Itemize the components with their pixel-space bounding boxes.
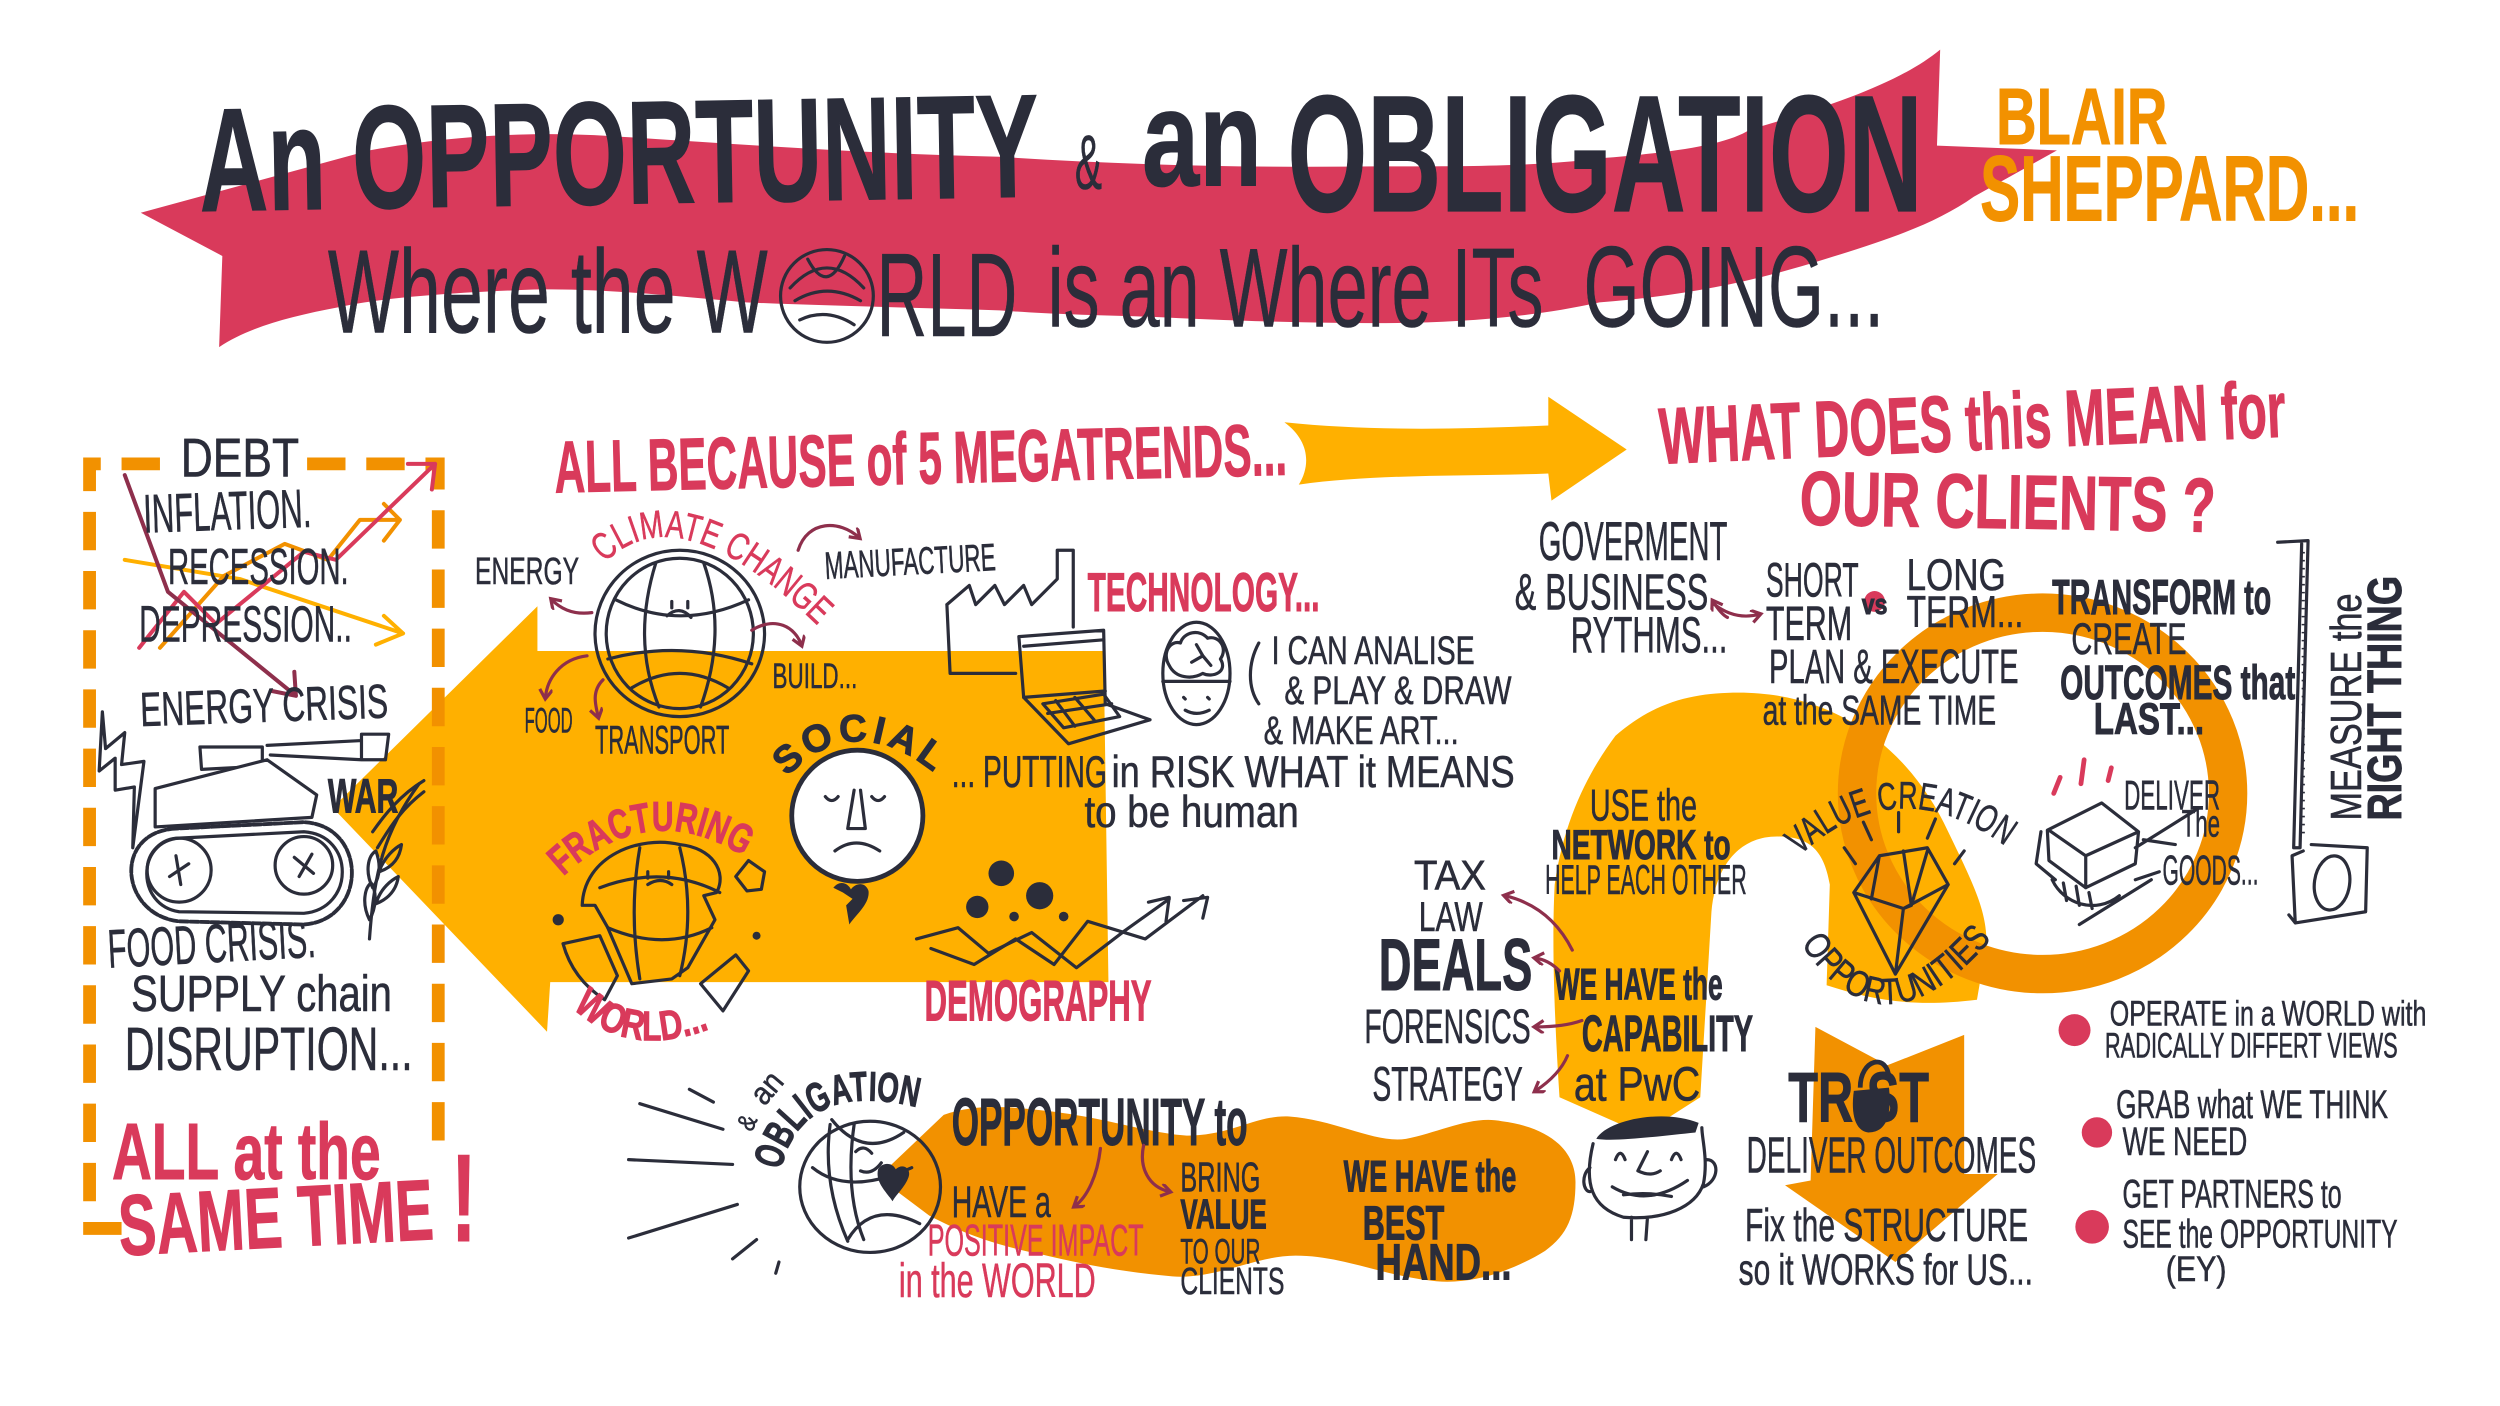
section: trust: TR ST	[1788, 1057, 1929, 1136]
icon: measuring tape: RIGHT THING	[2359, 576, 2412, 821]
section: government and business rhythms: PLAN & EXECUTE	[1769, 641, 2019, 694]
bullet list: actions: GET PARTNERS to	[2123, 1173, 2342, 1217]
section: capability text: HELP EACH OTHER	[1545, 856, 1747, 903]
panel text: crises list: INFLATION.	[142, 478, 312, 545]
section: opportunity text: HAVE a	[952, 1177, 1051, 1227]
presenter name	[1980, 72, 2359, 241]
icon: lightning bolt	[99, 712, 144, 848]
section: government and business rhythms: & BUSINESS	[1515, 563, 1708, 620]
section: transform to create outcomes: LAST...	[2094, 694, 2204, 744]
panel text: crises list: ENERGY CRISIS	[139, 676, 389, 737]
section: obligation globe: OBLIGATION	[755, 1071, 922, 1166]
panel text: crises list: RECESSION.	[168, 538, 349, 595]
megatrend: technology: & MAKE ART...	[1264, 709, 1459, 753]
section: opportunity text: in the WORLD	[899, 1255, 1096, 1308]
icon: measuring tape: MEASURE the	[2323, 593, 2371, 821]
section: trust	[1739, 1057, 2036, 1294]
section: capability text: at PwC	[1574, 1058, 1700, 1111]
subtitle: where the world is and where it's going	[328, 223, 1884, 362]
section: government and business rhythms: LONG	[1907, 550, 2006, 600]
heading: megatrends: ALL BECAUSE of 5 MEGATRENDS...	[553, 408, 1288, 509]
megatrend: climate change: FOOD	[525, 702, 573, 741]
megatrend: climate change: MANUFACTURE	[824, 536, 997, 588]
megatrend: demography	[917, 861, 1208, 1033]
panel text: crises list: FOOD CRISIS.	[106, 908, 317, 980]
megatrend: fracturing world	[545, 802, 766, 1041]
section: opportunity text: POSITIVE IMPACT	[928, 1216, 1144, 1266]
section: opportunity text	[899, 1085, 1516, 1308]
icon: wheat	[365, 781, 424, 939]
panel text: crises list: DEBT	[181, 428, 299, 489]
orange down arrow: trust	[1785, 1027, 1998, 1262]
section: government and business rhythms: GOVERMENT	[1539, 511, 1727, 572]
bullet list: actions: WE NEED	[2123, 1120, 2247, 1164]
section: obligation globe: &	[732, 1110, 763, 1135]
megatrend: social	[773, 714, 937, 924]
section: transform to create outcomes: CREATE	[2071, 614, 2187, 664]
big yellow arrow	[333, 606, 1108, 1032]
callout: all at the same time: !	[451, 1129, 477, 1268]
section: trust: so it WORKS for US...	[1739, 1246, 2033, 1294]
section: government and business rhythms: TERM...	[1907, 587, 2023, 637]
section: capability text	[1364, 781, 1753, 1111]
icon: globe with face as letter O	[781, 250, 873, 342]
subtitle: where the world is and where it's going: GOING...	[1583, 223, 1884, 351]
subtitle: where the world is and where it's going: RLD	[877, 230, 1017, 362]
section: value creation diamond	[1782, 782, 2018, 1005]
subtitle: where the world is and where it's going: Where the W	[328, 227, 768, 359]
megatrend: demography: DEMOGRAPHY	[925, 969, 1152, 1033]
callout: all at the same time	[112, 1107, 477, 1275]
section: capability text: WE HAVE the	[1555, 960, 1723, 1010]
icon: tank	[131, 734, 389, 925]
panel text: crises list: DEPRESSION..	[139, 595, 352, 652]
section: value creation diamond: VALUE CREATION	[1782, 782, 2018, 851]
title: main heading: &	[1075, 121, 1102, 206]
presenter name: BLAIR	[1996, 72, 2167, 161]
section: opportunity text: OPPORTUNITY to	[952, 1085, 1248, 1160]
section: capability text: FORENSICS	[1364, 1001, 1531, 1054]
section: opportunity text: HAND...	[1376, 1234, 1512, 1291]
icon: delivering box: GOODS...	[2163, 847, 2258, 894]
section: trust: Fix the STRUCTURE	[1745, 1199, 2028, 1251]
section: opportunity text: CLIENTS	[1180, 1260, 1284, 1303]
section: capability text: STRATEGY	[1372, 1058, 1523, 1111]
icon: measuring tape	[2278, 541, 2412, 923]
megatrend: technology: in RISK WHAT it MEANS	[1112, 747, 1515, 797]
banner: red ribbon	[141, 50, 2057, 347]
megatrend: climate change	[475, 510, 997, 762]
section: opportunity text: BRING	[1180, 1154, 1260, 1201]
title: main heading: an	[1142, 62, 1262, 216]
icon: delivering box	[2036, 760, 2258, 925]
bullet list: actions	[2059, 994, 2426, 1289]
top arrow to clients	[1284, 397, 1627, 501]
megatrend: technology: ... PUTTING	[952, 747, 1107, 797]
section: government and business rhythms	[1515, 511, 2023, 734]
megatrend: technology: & PLAY & DRAW	[1284, 669, 1512, 713]
megatrend: technology: to be human	[1084, 787, 1299, 837]
serpentine yellow arrow	[1553, 693, 1987, 1134]
section: trust: DELIVER OUTCOMES	[1747, 1126, 2036, 1183]
icon: delivering box: DELIVER	[2124, 771, 2220, 818]
icon: delivering box: The	[2182, 803, 2220, 846]
section: opportunity text: VALUE	[1180, 1190, 1267, 1237]
section: value creation diamond: OPPORTUNITIES	[1805, 925, 1988, 1005]
panel text: crises list	[106, 428, 413, 1083]
heading: what does this mean for our clients	[1657, 365, 2287, 549]
dark orange blob: best hand	[878, 1107, 1575, 1282]
section: capability text: TAX	[1414, 851, 1486, 898]
section: government and business rhythms: TERM	[1766, 598, 1852, 651]
section: government and business rhythms: SHORT	[1766, 555, 1859, 608]
subtitle: where the world is and where it's going: is an Where ITs	[1048, 225, 1544, 350]
bullet list: actions: (EY)	[2166, 1250, 2226, 1289]
section: capability text: NETWORK to	[1552, 821, 1731, 868]
section: transform to create outcomes	[2052, 569, 2295, 744]
section: opportunity text: TO OUR	[1180, 1233, 1260, 1272]
section: opportunity text: BEST	[1363, 1198, 1444, 1251]
megatrend: technology: TECHNOLOGY...	[1088, 562, 1320, 623]
panel: crises dashed box	[90, 464, 438, 1228]
megatrend: fracturing world: FRACTURING	[545, 802, 753, 876]
section: capability text: DEALS	[1379, 923, 1532, 1006]
section: government and business rhythms: vs	[1862, 589, 1887, 621]
section: capability text: USE the	[1590, 781, 1697, 831]
dark orange ring	[1857, 613, 2228, 974]
callout: all at the same time: ALL at the	[112, 1107, 381, 1196]
icon: smiling head	[1584, 1116, 1716, 1240]
megatrend: technology	[947, 550, 1515, 837]
panel text: crises list: SUPPLY chain	[131, 965, 392, 1022]
section: obligation globe: an	[742, 1064, 790, 1111]
megatrend: fracturing world: WORLD...	[576, 985, 708, 1041]
megatrend: climate change: ENERGY	[475, 550, 579, 593]
megatrend: climate change: CLIMATE CHANGE	[592, 510, 835, 626]
title: main heading: An OPPORTUNITY	[198, 65, 1040, 243]
heading: what does this mean for our clients: OUR CLIENTS ?	[1799, 457, 2216, 549]
section: capability text: CAPABILITY	[1582, 1005, 1753, 1062]
title: main heading: OBLIGATION	[1288, 61, 1923, 247]
megatrend: social: SOCIAL	[773, 714, 937, 773]
megatrend: climate change: BUILD...	[773, 657, 857, 696]
panel text: crises list: DISRUPTION...	[125, 1015, 413, 1083]
section: capability text: LAW	[1419, 893, 1483, 940]
callout: all at the same time: SAME TIME	[116, 1162, 436, 1275]
section: opportunity text: WE HAVE the	[1344, 1152, 1516, 1202]
megatrend: climate change: TRANSPORT	[595, 718, 729, 762]
section: transform to create outcomes: TRANSFORM to	[2052, 569, 2271, 625]
section: obligation globe	[627, 1064, 942, 1275]
chart: crossing trend lines	[125, 464, 435, 696]
section: government and business rhythms: at the SAME TIME	[1763, 687, 1996, 734]
section: government and business rhythms: RYTHMS...	[1571, 607, 1727, 664]
megatrend: technology: I CAN ANALISE	[1272, 629, 1475, 673]
panel text: crises list: WAR	[328, 771, 398, 824]
section: transform to create outcomes: OUTCOMES that	[2060, 657, 2295, 710]
